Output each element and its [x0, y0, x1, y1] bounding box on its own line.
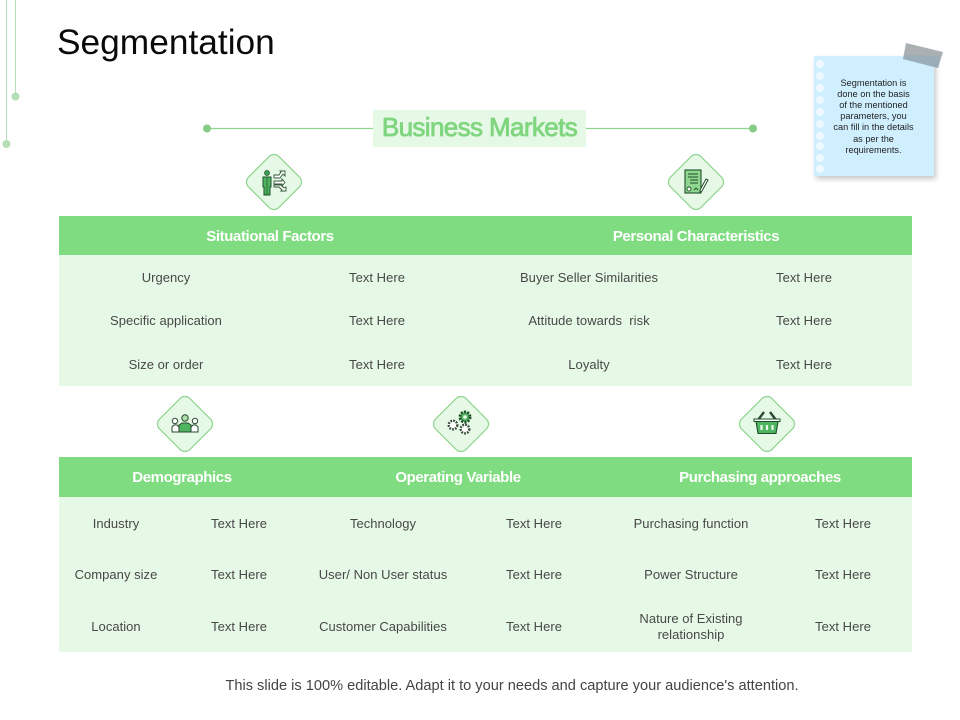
icon: purchasing approaches	[738, 396, 796, 452]
icon: operating variable	[432, 396, 490, 452]
row label: Urgency: Urgency	[142, 270, 190, 285]
header: Purchasing approaches: Purchasing approaches	[679, 469, 841, 486]
header: Operating Variable: Operating Variable	[395, 469, 521, 486]
header: Demographics: Demographics	[132, 469, 232, 486]
row value: Text Here	[776, 357, 832, 372]
note text	[833, 78, 914, 155]
note text: as per the	[853, 134, 894, 144]
note text: requirements.	[845, 145, 902, 155]
row label: Company size: Company size	[75, 567, 157, 582]
table 1 header band	[59, 216, 912, 255]
row value: Text Here	[815, 567, 871, 582]
row label: User/ Non User status: User/ Non User status	[319, 567, 447, 582]
row value: Text Here	[211, 619, 267, 634]
heading: Business Markets: Business Markets	[382, 112, 577, 142]
row value: Text Here	[815, 516, 871, 531]
row label: Specific application: Specific application	[110, 313, 222, 328]
table 2 header band	[59, 457, 912, 497]
note holes	[816, 60, 824, 173]
row value: Text Here	[506, 516, 562, 531]
note text: parameters, you	[840, 111, 907, 121]
note text: can fill in the details	[833, 122, 914, 132]
row value: Text Here	[815, 619, 871, 634]
icon: personal characteristics	[668, 154, 724, 210]
row label: Location: Location	[91, 619, 141, 634]
heading connector line	[203, 124, 757, 132]
row label: Customer Capabilities: Customer Capabilities	[319, 619, 447, 634]
row value: Text Here	[349, 270, 405, 285]
sticky note	[814, 56, 934, 176]
row value: Text Here	[211, 567, 267, 582]
row label: Size or order: Size or order	[129, 357, 203, 372]
row label: Attitude towards risk: Attitude towards risk	[528, 313, 650, 328]
row value: Text Here	[776, 270, 832, 285]
row value: Text Here	[349, 313, 405, 328]
note tape	[903, 43, 943, 68]
note text: Segmentation is	[841, 78, 906, 88]
note text: of the mentioned	[839, 100, 908, 110]
row label: Technology: Technology	[350, 516, 416, 531]
row label: Nature of Existing relationship: relationship	[658, 627, 724, 642]
row label: Purchasing function: Purchasing function	[634, 516, 748, 531]
icon: demographics	[156, 396, 214, 452]
header: Personal Characteristics: Personal Characteristics	[613, 228, 779, 245]
row value: Text Here	[349, 357, 405, 372]
row value: Text Here	[506, 619, 562, 634]
decorative corner lines	[2, 0, 20, 148]
table 2 body	[59, 497, 912, 652]
row label: Nature of Existing relationship	[639, 611, 743, 642]
row value: Text Here	[506, 567, 562, 582]
footer text: This slide is 100% editable. Adapt it to your needs and capture your audience's attention.	[225, 678, 799, 694]
table 1 body	[59, 255, 912, 386]
header: Situational Factors: Situational Factors	[206, 228, 334, 245]
row value: Text Here	[211, 516, 267, 531]
row label: Power Structure: Power Structure	[644, 567, 738, 582]
row label: Industry: Industry	[93, 516, 139, 531]
row label: Buyer Seller Similarities: Buyer Seller Similarities	[520, 270, 658, 285]
row label: Nature of Existing relationship: Nature of Existing	[639, 611, 743, 626]
row label: Loyalty: Loyalty	[568, 357, 610, 372]
icon: situational factors	[246, 154, 302, 210]
note text: done on the basis	[837, 89, 910, 99]
title: Segmentation	[57, 23, 275, 62]
row value: Text Here	[776, 313, 832, 328]
